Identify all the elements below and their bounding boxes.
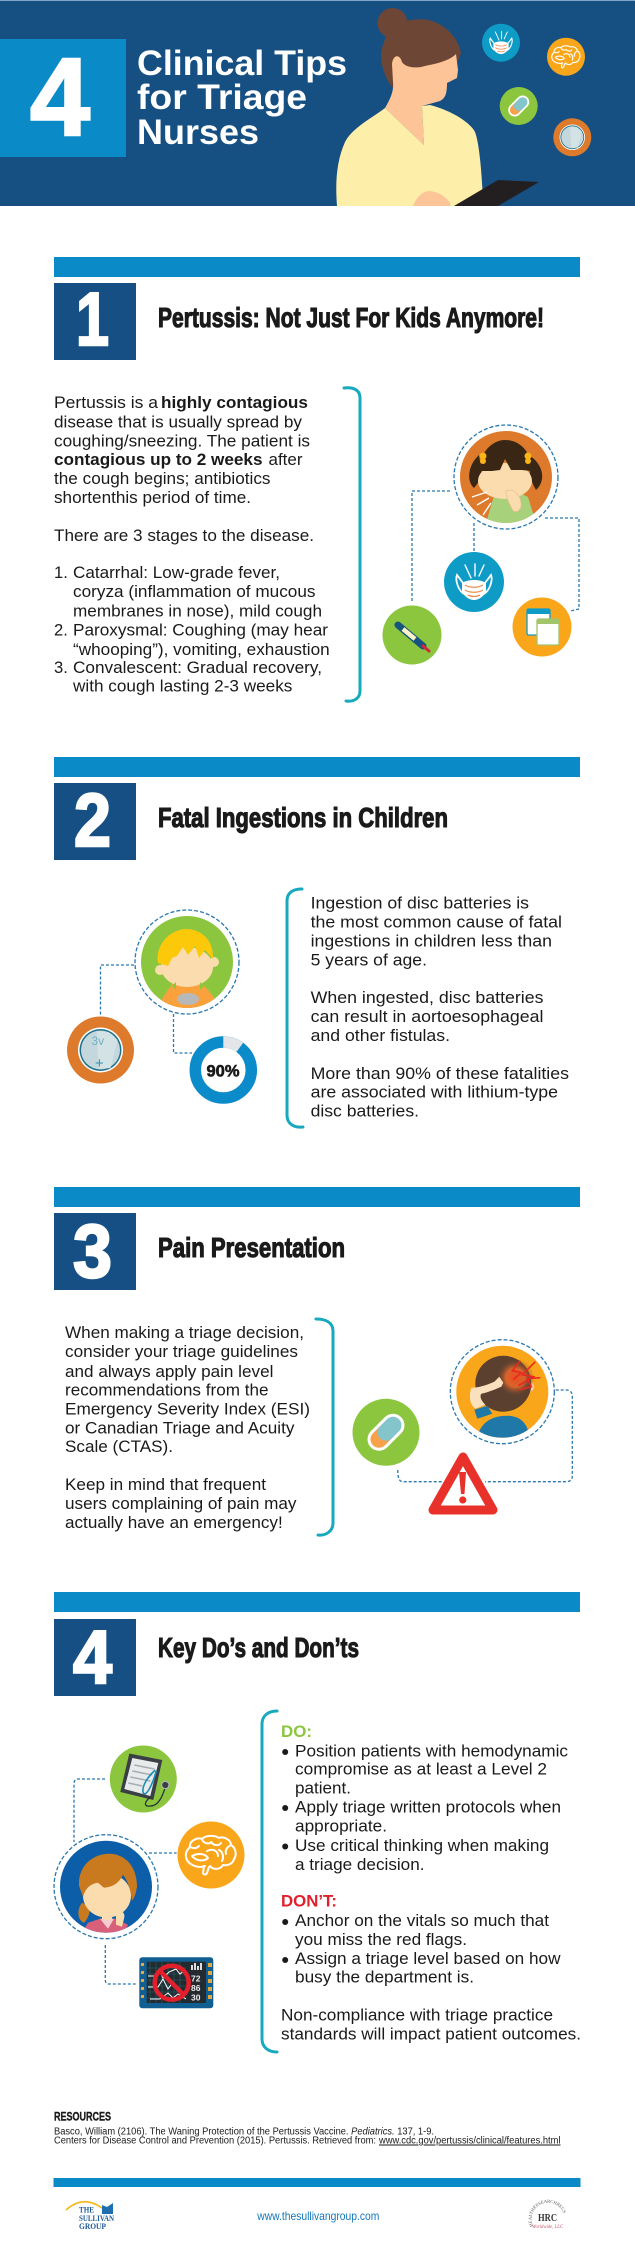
logo: The Sullivan Group: SULLIVAN xyxy=(79,2214,114,2223)
section 3 text block: consider your triage guidelines xyxy=(65,1342,298,1361)
logo: HRC: HEALTHRESEARCHREGS xyxy=(528,2200,566,2227)
section 2 text block: ingestions in children less than xyxy=(311,932,552,950)
section 1 text block: coryza (inflammation of mucous xyxy=(73,582,316,601)
resources: RESOURCES xyxy=(54,2110,111,2124)
icon: battery circle xyxy=(67,1016,134,1084)
title: for Triage xyxy=(137,78,307,117)
don't list: Assign a triage level based on how xyxy=(295,1949,562,1968)
don't list xyxy=(282,1911,562,1986)
section 1 text block: Convalescent: Gradual recovery, xyxy=(73,658,322,677)
don't heading: DON’T: xyxy=(281,1892,337,1911)
icon: mask circle xyxy=(444,552,504,612)
closing note: standards will impact patient outcomes. xyxy=(281,2024,581,2044)
section 3 text block xyxy=(65,1323,310,1532)
resources: Centers for Disease Control and Prevention (2015). Pertussis. Retrieved from: xyxy=(54,2136,376,2146)
logo: HRC: Worldwide, LLC xyxy=(532,2225,564,2230)
nurse illustration xyxy=(336,8,539,206)
section 3 number xyxy=(54,1209,136,1293)
section 1 text block: 3. xyxy=(54,658,68,677)
section 2 number: 2 xyxy=(74,778,111,862)
title: Clinical Tips xyxy=(137,44,347,83)
don't list: busy the department is. xyxy=(295,1968,474,1986)
do list: Position patients with hemodynamic xyxy=(295,1742,568,1761)
donut chart: 90%: 90% xyxy=(206,1062,240,1080)
section 2 heading: Fatal Ingestions in Children xyxy=(158,802,448,833)
panel: header banner xyxy=(0,0,635,206)
icon: thermometer circle xyxy=(382,606,442,664)
section 1 text block: disease that is usually spread by xyxy=(54,412,303,432)
resources: Basco, William (2106). The Waning Protection of the Pertussis Vaccine. Pediatrics. 137, 1-9. xyxy=(54,2126,434,2138)
section 4 connectors xyxy=(74,1779,177,1984)
icon: warning triangle xyxy=(433,1457,493,1510)
logo: The Sullivan Group xyxy=(66,2202,114,2231)
section 1 text block: “whooping”), vomiting, exhaustion xyxy=(73,640,330,659)
section 2 text block: When ingested, disc batteries xyxy=(311,988,544,1007)
icon: thinking nurse xyxy=(54,1835,158,1939)
icon: monitor with no symbol: 86 xyxy=(191,1983,201,1993)
do heading: DO: xyxy=(281,1722,312,1741)
section 3 text block: recommendations from the xyxy=(65,1380,268,1400)
section 3 text block: and always apply pain level xyxy=(65,1362,273,1381)
resources xyxy=(54,2110,560,2146)
section 3 text block: Emergency Severity Index (ESI) xyxy=(65,1400,310,1419)
icon: headache patient xyxy=(450,1340,554,1444)
website: www.thesullivangroup.com xyxy=(256,2209,379,2223)
do list: Apply triage written protocols when xyxy=(295,1798,561,1817)
section 4 heading: Key Do’s and Don’ts xyxy=(158,1632,359,1663)
section 3 connectors xyxy=(398,1390,572,1482)
section 1 text block: shortenthis period of time. xyxy=(54,488,251,507)
section 2 text block: and other fistulas. xyxy=(311,1026,450,1045)
title: Nurses xyxy=(137,113,259,152)
section 2 text block: the most common cause of fatal xyxy=(311,912,562,932)
section 3 text block: or Canadian Triage and Acuity xyxy=(65,1418,295,1438)
section 2 text block: 5 years of age. xyxy=(311,950,427,970)
logo: The Sullivan Group: THE xyxy=(79,2206,94,2215)
icon: mask xyxy=(482,24,520,62)
icon: pill xyxy=(500,87,538,125)
section 3 text block: Scale (CTAS). xyxy=(65,1437,173,1456)
don't list: you miss the red flags. xyxy=(295,1930,467,1949)
section 2 bar xyxy=(54,757,580,777)
section 1 text block xyxy=(54,393,330,696)
section 3 text block: actually have an emergency! xyxy=(65,1513,283,1532)
icon: battery circle: 3v xyxy=(92,1034,104,1048)
logo: HRC: HRC xyxy=(538,2213,557,2224)
section 1 text block: after xyxy=(268,450,303,469)
donut chart: 90% xyxy=(195,1042,251,1098)
section 3 bracket xyxy=(316,1319,333,1535)
section 3 text block: When making a triage decision, xyxy=(65,1323,304,1342)
do list: a triage decision. xyxy=(295,1855,424,1874)
section 2 number xyxy=(54,778,136,862)
section 4 number xyxy=(54,1615,136,1699)
do list xyxy=(282,1742,568,1874)
section 2 text block: are associated with lithium-type xyxy=(311,1083,558,1102)
section 2 connectors xyxy=(100,965,192,1053)
icon: coughing girl xyxy=(454,425,558,529)
section 1 text block: Paroxysmal: Coughing (may hear xyxy=(73,620,328,640)
section 1 text block: 1. xyxy=(54,563,68,582)
section 4 number: 4 xyxy=(73,1615,112,1699)
do list: appropriate. xyxy=(295,1817,387,1836)
do list: patient. xyxy=(295,1778,351,1797)
icon: battery circle: + xyxy=(95,1055,104,1072)
icon: monitor with no symbol: 30 xyxy=(191,1992,201,2002)
section 1 text block: Pertussis is a xyxy=(54,393,159,412)
section 3 heading: Pain Presentation xyxy=(158,1232,345,1263)
section 1 bracket xyxy=(344,388,360,701)
footer bar xyxy=(54,2178,580,2187)
section 4 text block xyxy=(281,1722,581,2044)
don't list: Anchor on the vitals so much that xyxy=(295,1911,549,1930)
title xyxy=(137,44,347,152)
icon: clipboard with stethoscope xyxy=(110,1746,177,1812)
section 2 text block: More than 90% of these fatalities xyxy=(311,1064,569,1083)
section 1 bar xyxy=(54,257,580,277)
icon: calendar circle xyxy=(512,598,572,656)
icon: brain circle xyxy=(178,1822,244,1888)
icon: boy with disc battery xyxy=(135,910,239,1014)
section 1 number: 1 xyxy=(76,277,109,361)
section 1 text block: There are 3 stages to the disease. xyxy=(54,526,314,545)
section 1 text block: coughing/sneezing. The patient is xyxy=(54,432,310,450)
icon: brain xyxy=(547,38,585,76)
section 3 number: 3 xyxy=(73,1209,112,1293)
section 4 bar xyxy=(54,1592,580,1612)
logo: The Sullivan Group: GROUP xyxy=(79,2222,106,2231)
section 1 number xyxy=(54,277,136,361)
section 2 text block: Ingestion of disc batteries is xyxy=(311,893,529,912)
section 2 text block: can result in aortoesophageal xyxy=(311,1007,544,1026)
section 1 text block: the cough begins; antibiotics xyxy=(54,469,270,488)
icon: monitor with no symbol: 72 xyxy=(191,1974,201,1984)
closing note: Non-compliance with triage practice xyxy=(281,2006,553,2025)
section 2 text block xyxy=(311,893,569,1121)
section 4 bracket xyxy=(262,1711,277,2052)
section 3 text block: Keep in mind that frequent xyxy=(65,1475,266,1494)
icon: battery xyxy=(553,118,591,156)
section 1 text block: 2. xyxy=(54,620,68,640)
section 2 bracket xyxy=(287,889,303,1127)
section 3 text block: users complaining of pain may xyxy=(65,1494,297,1513)
do list: compromise as at least a Level 2 xyxy=(295,1760,547,1778)
section 1 text block: membranes in nose), mild cough xyxy=(73,602,322,620)
icon: pill circle xyxy=(352,1399,420,1466)
section 1 text block: with cough lasting 2-3 weeks xyxy=(72,676,292,696)
section 1 text block: Catarrhal: Low-grade fever, xyxy=(73,563,280,582)
icon: monitor with no symbol xyxy=(139,1957,213,2008)
section 2 text block: disc batteries. xyxy=(311,1102,419,1121)
section 1 text block: highly contagious xyxy=(161,393,308,412)
do list: Use critical thinking when making xyxy=(295,1836,549,1855)
section 1 text block: contagious up to 2 weeks xyxy=(54,450,262,469)
header number box xyxy=(0,36,126,159)
section 3 bar xyxy=(54,1187,580,1207)
closing note xyxy=(281,2006,581,2044)
header number box: 4 xyxy=(30,36,90,159)
resources: www.cdc.gov/pertussis/clinical/features.html xyxy=(378,2136,560,2146)
section 1 connectors xyxy=(412,491,579,611)
